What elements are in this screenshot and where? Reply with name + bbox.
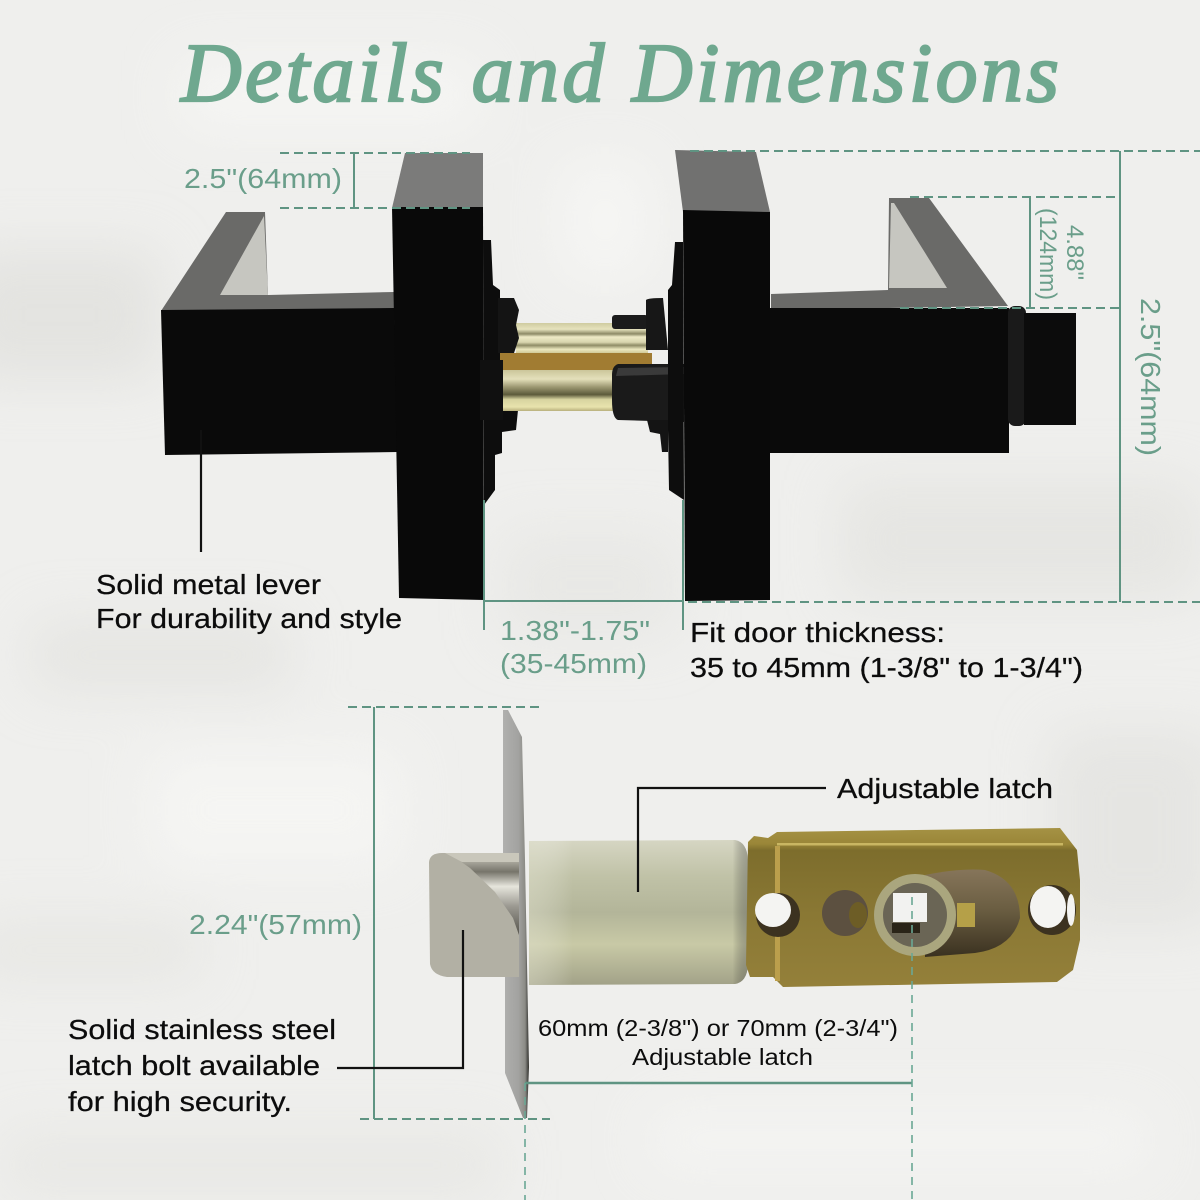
connecting spindle pins bbox=[480, 298, 684, 452]
callout: stainless steel latch bolt: Solid stainless steel bbox=[68, 1014, 336, 1045]
left lever bbox=[161, 212, 398, 455]
latch bolt bbox=[429, 853, 519, 977]
dimension: 2.5 inch right height bbox=[688, 151, 1200, 602]
dimension: 2.5 inch top left bbox=[184, 153, 470, 208]
dimension: latch plate height bbox=[189, 707, 550, 1119]
right rose plate bbox=[668, 150, 770, 601]
dimension: backset length: 60mm (2-3/8") or 70mm (2-3/4") bbox=[538, 1015, 898, 1041]
left rose plate bbox=[392, 153, 518, 600]
title: Details and Dimensions bbox=[180, 27, 1059, 120]
callout: adjustable latch: Adjustable latch bbox=[837, 773, 1053, 804]
strike plate bbox=[503, 710, 529, 1118]
callout: fit door thickness: 35 to 45mm (1-3/8" to 1-3/4") bbox=[690, 652, 1083, 683]
dimension: backset length: Adjustable latch bbox=[632, 1044, 813, 1070]
dimension: door thickness: 1.38"-1.75" bbox=[500, 615, 650, 646]
product photo: lever handle set bbox=[161, 150, 1076, 601]
dimension: 4.88 inch handle bbox=[900, 197, 1120, 308]
callout: solid metal lever: Solid metal lever bbox=[96, 569, 321, 600]
callout: stainless steel latch bolt: latch bolt available bbox=[68, 1050, 320, 1081]
callout: stainless steel latch bolt: for high security. bbox=[68, 1086, 292, 1117]
callout: stainless steel latch bolt bbox=[68, 930, 463, 1117]
brass housing bbox=[746, 828, 1080, 987]
right lever and end knob bbox=[770, 198, 1076, 453]
callout: fit door thickness bbox=[690, 617, 1083, 683]
dimension: 4.88 inch handle: 4.88" bbox=[1061, 225, 1088, 280]
dimension: backset length bbox=[525, 897, 912, 1200]
callout: solid metal lever bbox=[96, 430, 402, 634]
cylinder body bbox=[529, 840, 748, 985]
dimension: 4.88 inch handle: (124mm) bbox=[1034, 208, 1061, 300]
dimension: 2.5 inch right height: 2.5"(64mm) bbox=[1135, 298, 1166, 456]
dimension: latch plate height: 2.24"(57mm) bbox=[189, 909, 362, 940]
dimension: door thickness: (35-45mm) bbox=[500, 648, 647, 679]
dimension: 2.5 inch top left: 2.5"(64mm) bbox=[184, 163, 342, 194]
callout: fit door thickness: Fit door thickness: bbox=[690, 617, 945, 648]
callout: solid metal lever: For durability and style bbox=[96, 603, 402, 634]
dimension: door thickness bbox=[484, 500, 683, 679]
product photo: adjustable latch bbox=[429, 710, 1080, 1118]
callout: adjustable latch bbox=[638, 773, 1053, 892]
